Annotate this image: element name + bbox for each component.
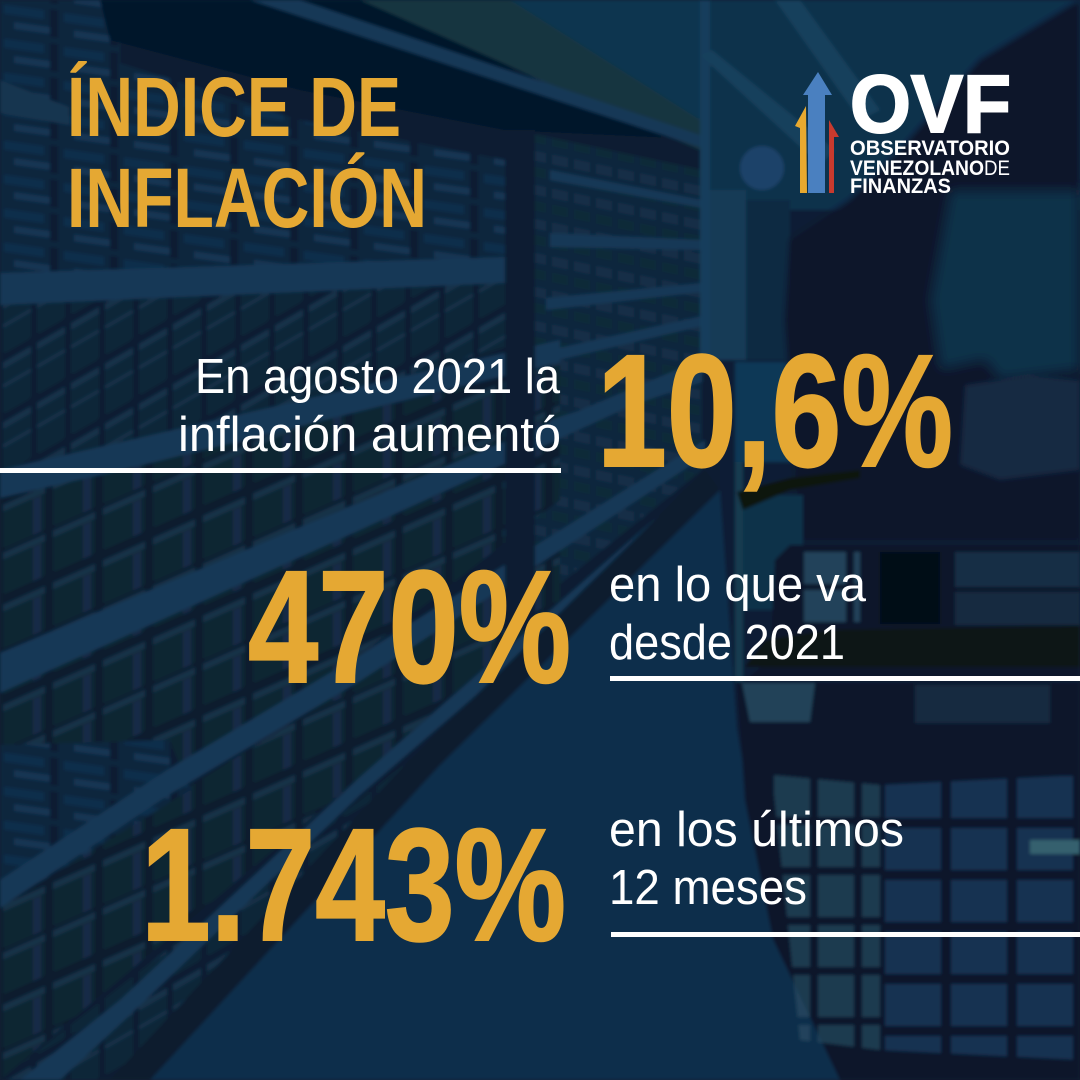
value: 470% bbox=[248, 537, 571, 716]
floor bbox=[110, 470, 840, 1080]
description: En agosto 2021 la bbox=[195, 350, 561, 404]
description: en lo que va bbox=[609, 558, 867, 612]
logo: OVF: OBSERVATORIO bbox=[850, 137, 1010, 160]
description bbox=[609, 558, 867, 670]
shopper bbox=[785, 0, 1080, 540]
logo: OVF: DE bbox=[984, 157, 1010, 180]
description: desde 2021 bbox=[609, 616, 845, 670]
stat 3: 1.743% bbox=[141, 795, 1080, 974]
description bbox=[178, 350, 561, 462]
stat 2: 470% bbox=[248, 537, 1080, 716]
value: 1.743% bbox=[141, 795, 566, 974]
value: 10,6% bbox=[597, 321, 953, 500]
description: inflación aumentó bbox=[178, 408, 561, 462]
shelves with products bbox=[0, 0, 720, 1080]
logo: OVF: FINANZAS bbox=[850, 175, 951, 198]
title: ÍNDICE DE bbox=[67, 60, 401, 154]
description: en los últimos bbox=[609, 803, 904, 857]
shelf edges bbox=[0, 0, 715, 1080]
logo: OVF: VENEZOLANO bbox=[850, 157, 984, 180]
logo: OVF bbox=[795, 59, 1011, 198]
back of the store bbox=[700, 0, 1080, 462]
title: INFLACIÓN bbox=[67, 151, 427, 245]
logo: OVF: OVF bbox=[850, 59, 1011, 150]
icon: rising arrows bbox=[795, 72, 839, 193]
description bbox=[609, 803, 904, 915]
title bbox=[67, 60, 427, 245]
shopping cart bbox=[735, 462, 1080, 1080]
description: 12 meses bbox=[609, 861, 807, 915]
stat 1: 10,6% bbox=[0, 321, 953, 500]
